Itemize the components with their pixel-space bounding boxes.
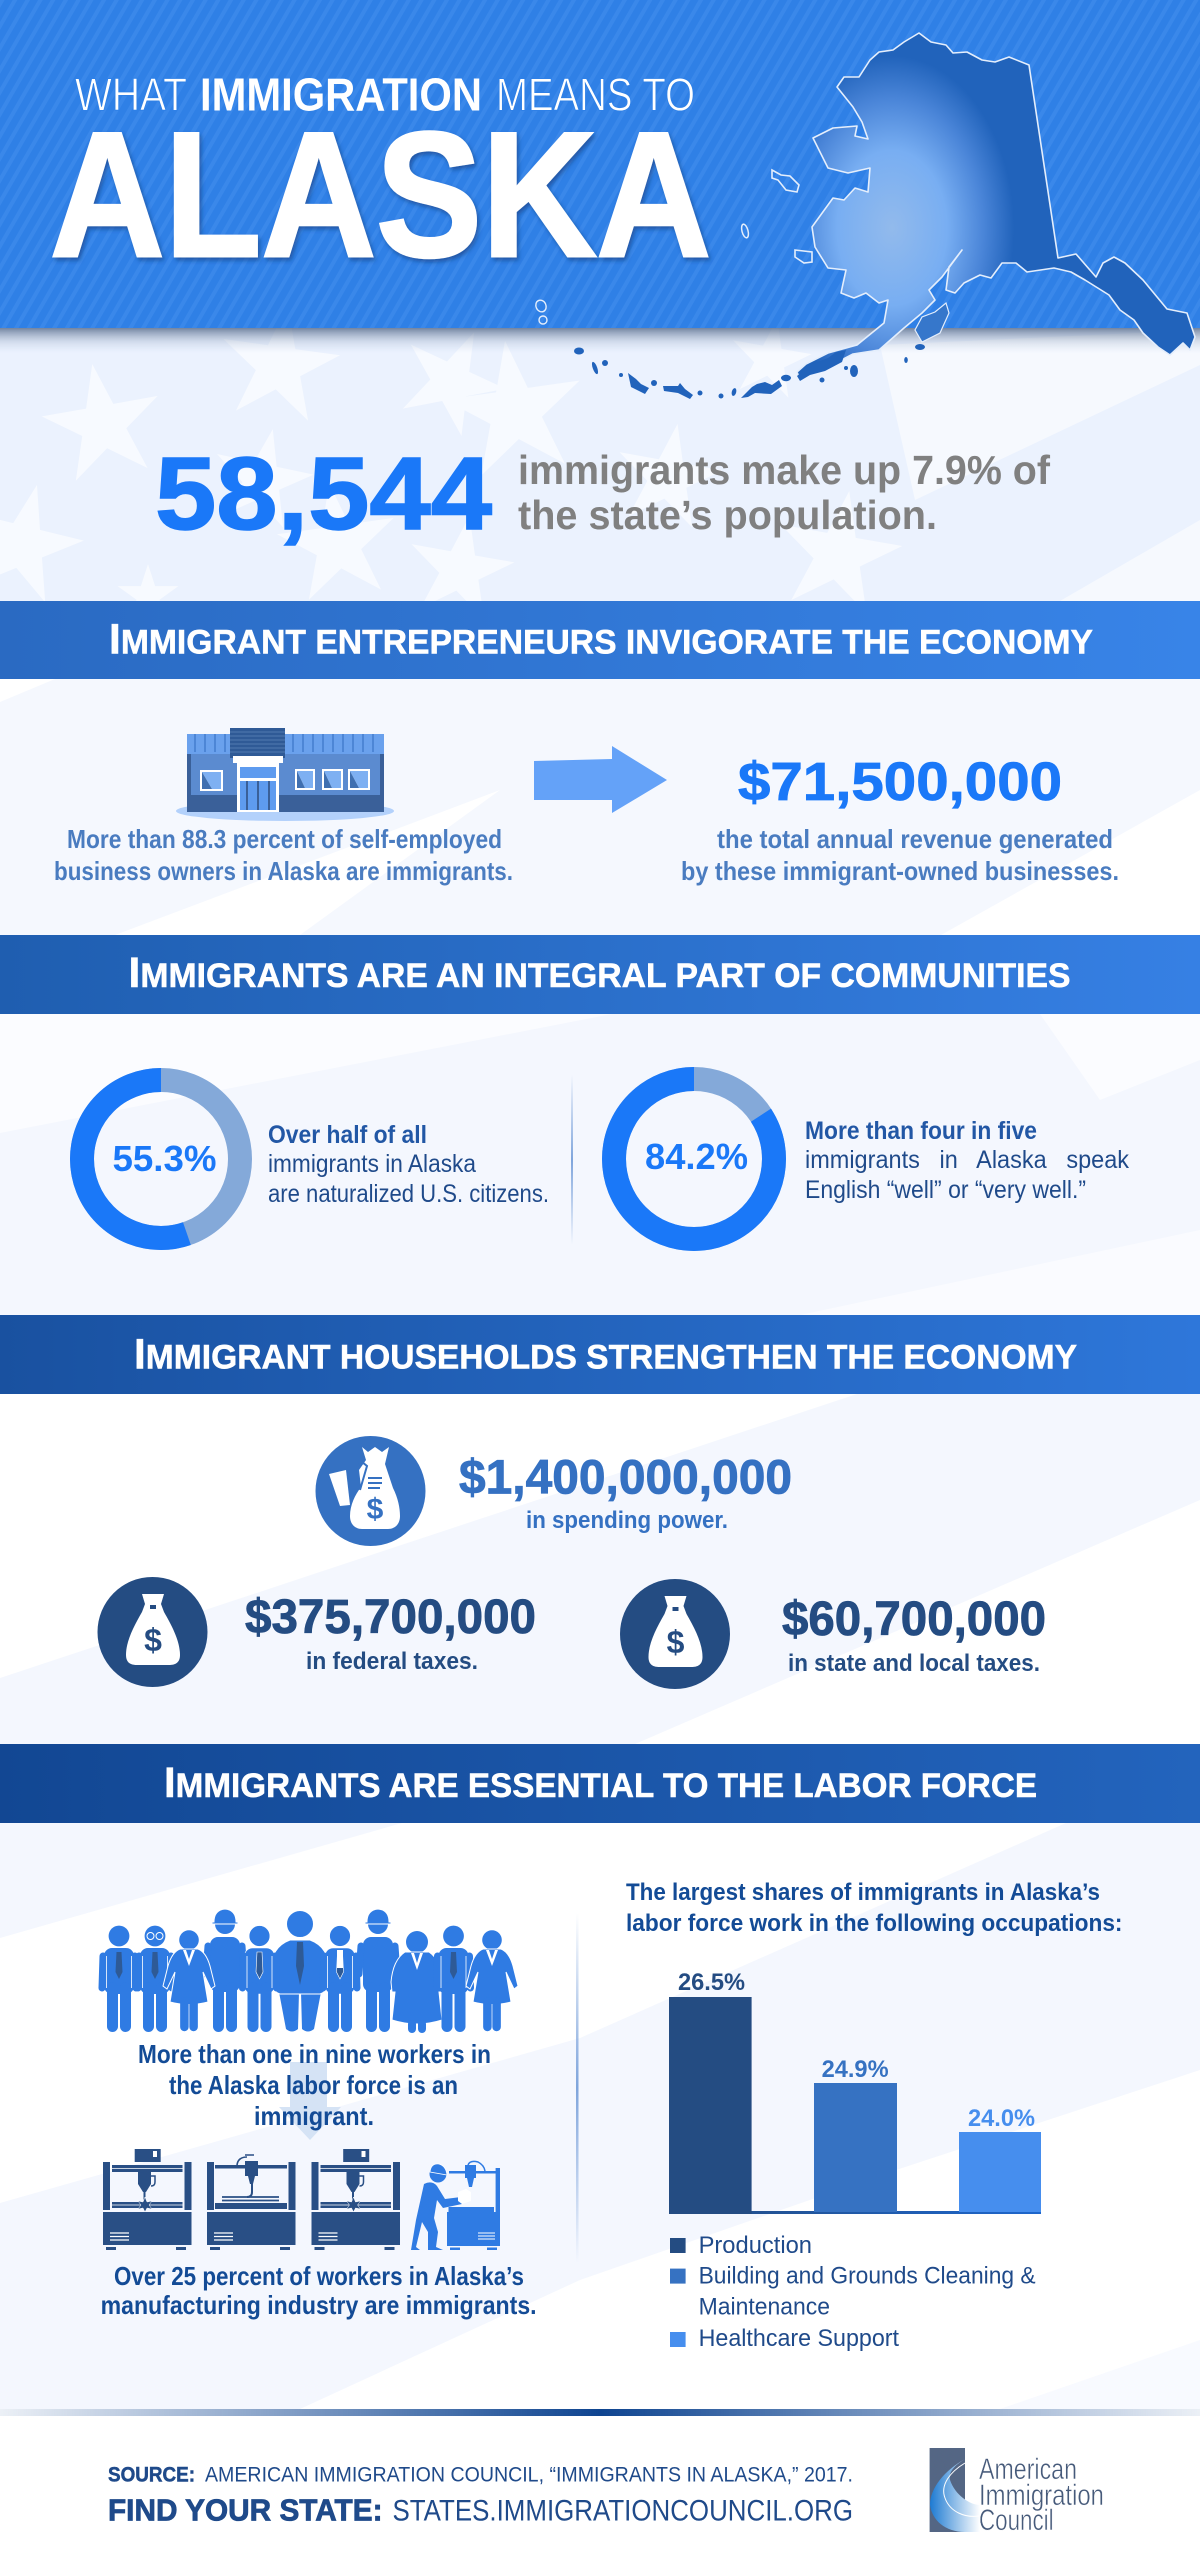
- text: chart heading: labor force work in the following occupations:: [626, 1910, 1122, 1937]
- text: one in nine workers: More than one in nine workers in: [138, 2039, 491, 2069]
- legend: Production: [699, 2232, 812, 2259]
- text: annual revenue: the total annual revenue generated: [717, 824, 1113, 854]
- bar: production: [669, 1969, 752, 2214]
- bar: building and grounds: [814, 2056, 897, 2212]
- stat: spending power: [459, 1452, 792, 1534]
- donut chart: naturalized citizens 55.3%: 55.3%: [112, 1138, 216, 1179]
- logo: American Immigration Council: [930, 2448, 1104, 2537]
- title line: what immigration means to: MEANS TO: [496, 68, 695, 120]
- banner: communities: [0, 935, 1200, 1014]
- panel: households: [98, 1436, 1046, 1689]
- banner: entrepreneurs: IMMIGRANT ENTREPRENEURS INVIGORATE THE ECONOMY: [109, 616, 1093, 664]
- headline statistic: [155, 436, 1050, 551]
- source line: AMERICAN IMMIGRATION COUNCIL, “IMMIGRANTS IN ALASKA,” 2017.: [205, 2464, 853, 2487]
- title line: what immigration means to: WHAT: [75, 68, 187, 120]
- legend: Building and Grounds Cleaning &: [699, 2263, 1036, 2290]
- stat: annual revenue: $71,500,000: [738, 752, 1062, 812]
- St. Lawrence Island: [772, 170, 799, 192]
- legend: Healthcare Support: [699, 2325, 899, 2352]
- text: share of business owners: More than 88.3 percent of self-employed: [67, 824, 502, 854]
- find your state line: STATES.IMMIGRATIONCOUNCIL.ORG: [392, 2495, 853, 2528]
- text: share of business owners: [54, 824, 513, 886]
- source line: SOURCE:: [108, 2464, 195, 2487]
- banner: communities: IMMIGRANTS ARE AN INTEGRAL PART OF COMMUNITIES: [128, 949, 1070, 997]
- text: share of business owners: business owners in Alaska are immigrants.: [54, 856, 513, 886]
- text: speak English: [805, 1117, 1129, 1204]
- icon: storefront: [176, 728, 394, 821]
- icon: money bag state: $: [667, 1624, 685, 1660]
- statistic text: the state’s population.: [518, 492, 937, 538]
- text: one in nine workers: immigrant.: [254, 2101, 374, 2131]
- banner: labor force: [0, 1744, 1200, 1823]
- arrow: [534, 746, 667, 813]
- Nunivak Island: [795, 250, 812, 263]
- map of Alaska: [534, 33, 1195, 399]
- banner: households: [0, 1315, 1200, 1394]
- icon: money bag state: [620, 1579, 730, 1689]
- banner: labor force: IMMIGRANTS ARE ESSENTIAL TO THE LABOR FORCE: [164, 1759, 1037, 1807]
- text: naturalized citizens: are naturalized U.S. citizens.: [268, 1180, 549, 1208]
- stat: state and local taxes: in state and local taxes.: [788, 1650, 1040, 1677]
- text: speak English: English “well” or “very well.”: [805, 1176, 1086, 1204]
- title: Alaska: ALASKA: [50, 95, 711, 294]
- icon: row of workers: [102, 1909, 518, 2032]
- stat: federal taxes: [245, 1591, 536, 1675]
- banner: households: IMMIGRANT HOUSEHOLDS STRENGTHEN THE ECONOMY: [134, 1331, 1077, 1379]
- logo: American Immigration Council: Council: [979, 2504, 1054, 2537]
- text: manufacturing workers: Over 25 percent of workers in Alaska’s: [114, 2261, 524, 2291]
- stat: federal taxes: in federal taxes.: [306, 1648, 478, 1675]
- text: naturalized citizens: immigrants in Alaska: [268, 1150, 476, 1178]
- banner: entrepreneurs: [0, 601, 1200, 679]
- stat: spending power: in spending power.: [526, 1507, 728, 1534]
- statistic text: immigrants make up 7.9% of: [518, 447, 1050, 493]
- bar: healthcare support: [959, 2105, 1041, 2212]
- title line: what immigration means to: IMMIGRATION: [200, 68, 482, 120]
- text: naturalized citizens: Over half of all: [268, 1121, 427, 1149]
- text: speak English: immigrants in Alaska speak: [805, 1146, 1129, 1174]
- donut chart: speak English 84.2%: 84.2%: [645, 1136, 748, 1177]
- text: manufacturing workers: [101, 2261, 537, 2320]
- legend: [670, 2232, 1036, 2352]
- footer: [108, 2448, 1104, 2537]
- text: manufacturing workers: manufacturing industry are immigrants.: [101, 2290, 537, 2320]
- header band: [0, 0, 1200, 354]
- Aleutian Islands: [574, 344, 925, 399]
- panel: communities: [82, 1075, 1129, 1245]
- find your state line: FIND YOUR STATE:: [108, 2493, 382, 2528]
- panel: entrepreneurs: [54, 728, 1119, 886]
- stat: state and local taxes: $60,700,000: [782, 1593, 1046, 1646]
- donut chart: speak English 84.2%: [614, 1079, 774, 1239]
- down arrow behind text: [279, 2062, 341, 2140]
- icon: hand holding money bag: [316, 1436, 426, 1546]
- stat: spending power: $1,400,000,000: [459, 1452, 792, 1504]
- text: one in nine workers: the Alaska labor force is an: [169, 2070, 458, 2100]
- logo: American Immigration Council: American: [979, 2453, 1077, 2486]
- text: naturalized citizens: [268, 1121, 549, 1208]
- fat man: [271, 1910, 329, 2032]
- text: chart heading: [626, 1879, 1122, 1937]
- text: annual revenue: [681, 824, 1119, 886]
- donut chart: naturalized citizens 55.3%: [82, 1080, 240, 1238]
- footer divider: [0, 2409, 1200, 2416]
- background: section waves: [0, 679, 1200, 2409]
- bar: building and grounds: 24.9%: [822, 2056, 889, 2083]
- Kodiak Island: [915, 303, 949, 342]
- background: flag stars area: [0, 296, 1200, 623]
- icon: money bag federal: [98, 1577, 208, 1687]
- icon: money bag federal: $: [144, 1622, 162, 1658]
- find your state line: [108, 2493, 853, 2528]
- title: [50, 68, 711, 294]
- worker at machine: [411, 2161, 500, 2250]
- text: chart heading: The largest shares of immigrants in Alaska’s: [626, 1879, 1100, 1906]
- bar: production: 26.5%: [678, 1969, 745, 1996]
- text: annual revenue: by these immigrant-owned businesses.: [681, 856, 1119, 886]
- text: speak English: More than four in five: [805, 1117, 1037, 1145]
- panel: labor force: [101, 1879, 1123, 2352]
- stat: federal taxes: $375,700,000: [245, 1591, 536, 1644]
- bar: healthcare support: 24.0%: [968, 2105, 1035, 2132]
- logo: American Immigration Council: Immigration: [979, 2479, 1104, 2512]
- big number: 58,544: [155, 436, 492, 551]
- legend: Maintenance: [699, 2294, 830, 2321]
- title line: what immigration means to: [75, 68, 695, 120]
- stat: state and local taxes: [782, 1593, 1046, 1677]
- text: one in nine workers: [138, 2039, 491, 2131]
- statistic text: [518, 447, 1050, 538]
- large woman: [391, 1931, 443, 2029]
- mainland: [797, 33, 1195, 377]
- Pribilof Islands: [534, 298, 548, 314]
- icon: hand holding money bag: $: [367, 1493, 384, 1526]
- icon: manufacturing machines: [103, 2149, 500, 2250]
- bar chart: occupations: [669, 1969, 1041, 2214]
